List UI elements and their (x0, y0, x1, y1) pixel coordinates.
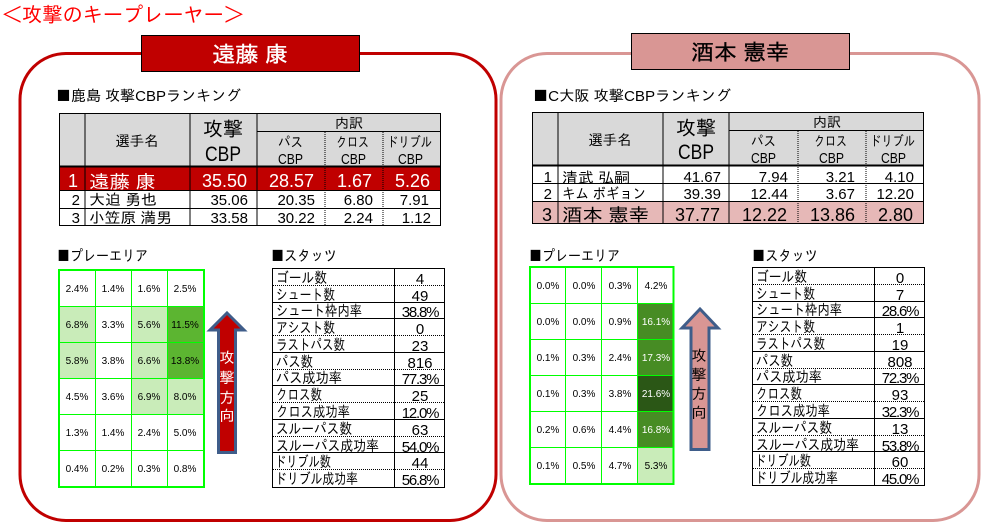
ranking table: Kashima: 大迫 勇也 (89, 192, 157, 209)
stats table: Sakamoto: シュート数 (756, 286, 815, 303)
arrow: attack direction: 攻 (220, 350, 234, 367)
stats table: Endo: パス数 (276, 354, 313, 371)
heatmap: Sakamoto play area: 0.1% (537, 353, 560, 364)
stats table: Endo: スルーパス成功率 (276, 438, 379, 455)
heading: play area: ■プレーエリア (57, 248, 148, 265)
ranking table: C Osaka: 37.77 (675, 205, 720, 225)
ranking table: Kashima: CBP (341, 151, 366, 168)
ranking table: Kashima: 内訳 (335, 115, 363, 131)
heatmap: Sakamoto play area: 0.6% (573, 425, 596, 436)
stats table: Endo: 12.0% (402, 405, 439, 422)
ranking table: Kashima: 6.80 (344, 192, 373, 209)
stats table: Endo: シュート枠内率 (276, 303, 362, 320)
arrow: attack direction: 向 (692, 405, 706, 422)
stats table: Sakamoto: クロス数 (756, 386, 802, 403)
stats table: Endo: 25 (412, 388, 428, 405)
heatmap: Sakamoto play area: 4.4% (609, 425, 632, 436)
ranking table: C Osaka: 12.44 (750, 186, 788, 203)
ranking table: Kashima: 2 (72, 192, 80, 209)
stats table: Sakamoto: 0 (896, 270, 904, 287)
heading: Kashima ranking: ■鹿島 攻撃CBPランキング (56, 88, 241, 105)
stats table: Sakamoto: スルーパス数 (756, 420, 832, 437)
stats table: Endo: ドリブル数 (275, 454, 331, 471)
ranking table: C Osaka: 3.21 (826, 169, 855, 186)
heatmap: Sakamoto play area: 3.8% (609, 389, 632, 400)
ranking table: C Osaka: 12.22 (742, 205, 787, 225)
stats table: Endo: クロス成功率 (276, 404, 350, 421)
heatmap: Sakamoto play area: 4.2% (645, 281, 668, 292)
stats table: Endo: アシスト数 (276, 320, 335, 337)
heatmap: Sakamoto play area: 0.0% (573, 317, 596, 328)
ranking table: C Osaka: 2.80 (878, 205, 913, 225)
ranking table: Kashima: 28.57 (269, 171, 314, 191)
ranking table: Kashima: 選手名 (116, 133, 158, 150)
heatmap: Sakamoto play area (530, 267, 674, 484)
player name banner: Endo (142, 36, 360, 72)
ranking table: C Osaka: クロス (814, 133, 847, 149)
arrow: attack direction (682, 309, 718, 450)
heatmap: Sakamoto play area: 0.1% (537, 389, 560, 400)
title: ＜攻撃のキープレーヤー＞ (2, 4, 244, 27)
player name banner: Sakamoto: 酒本 憲幸 (691, 40, 789, 65)
ranking table: C Osaka (532, 112, 924, 225)
heatmap: Endo play area: 1.4% (102, 284, 125, 295)
ranking table: Kashima: 30.22 (277, 210, 315, 227)
stats table: Sakamoto: 60 (892, 454, 908, 471)
ranking table: C Osaka: CBP (819, 150, 844, 167)
heatmap: Endo play area: 6.6% (138, 356, 161, 367)
stats table: Sakamoto: 32.3% (882, 404, 919, 421)
stats table: Endo: 816 (407, 355, 433, 372)
ranking table: C Osaka: 12.20 (876, 186, 914, 203)
heatmap: Endo play area: 8.0% (174, 392, 197, 403)
stats table: Endo: 49 (412, 288, 428, 305)
stats table: Sakamoto: 19 (892, 337, 908, 354)
heatmap: Sakamoto play area: 0.0% (573, 281, 596, 292)
heatmap: Sakamoto play area: 0.5% (573, 461, 596, 472)
stats table: Endo: パス成功率 (276, 370, 342, 387)
ranking table: C Osaka: 13.86 (810, 205, 855, 225)
stats table: Sakamoto: 13 (892, 421, 908, 438)
heatmap: Sakamoto play area: 0.2% (537, 425, 560, 436)
ranking table: C Osaka: 41.67 (683, 169, 721, 186)
arrow: attack direction: 撃 (692, 367, 706, 384)
ranking table: Kashima: 攻撃 (203, 119, 243, 141)
heatmap: Endo play area: 11.5% (171, 320, 199, 331)
stats table: Sakamoto: ゴール数 (756, 269, 807, 286)
stats table: Endo: 77.3% (402, 371, 439, 388)
heading: stats: ■スタッツ (271, 248, 337, 265)
stats table: Endo: ゴール数 (276, 270, 327, 287)
ranking table: C Osaka: 選手名 (588, 132, 632, 149)
ranking table: Kashima: 7.91 (400, 192, 429, 209)
player name banner: Sakamoto (632, 34, 850, 70)
ranking table: C Osaka: 3.67 (826, 186, 855, 203)
stats table: Sakamoto: 93 (892, 387, 908, 404)
arrow: attack direction: 撃 (220, 370, 234, 387)
heatmap: Endo play area: 4.5% (66, 392, 89, 403)
stats table: Sakamoto: シュート枠内率 (756, 302, 842, 319)
ranking table: Kashima: 小笠原 満男 (89, 210, 172, 227)
stats table: Endo: 4 (416, 271, 424, 288)
ranking table: Kashima: CBP (205, 143, 241, 166)
stats table: Endo: 44 (412, 455, 428, 472)
heading: stats: ■スタッツ (752, 248, 818, 265)
heatmap: Endo play area: 2.4% (138, 428, 161, 439)
ranking table: Kashima: CBP (278, 151, 303, 168)
stats table: Endo (272, 268, 444, 489)
panel: Sakamoto (501, 34, 979, 520)
heatmap: Sakamoto play area: 2.4% (609, 353, 632, 364)
heatmap: Endo play area: 1.4% (102, 428, 125, 439)
ranking table: Kashima: クロス (336, 134, 369, 150)
ranking table: C Osaka: ドリブル (870, 133, 915, 149)
player name banner: Endo: 遠藤 康 (212, 42, 288, 67)
heatmap: Endo play area: 5.0% (174, 428, 197, 439)
ranking table: C Osaka: 1 (544, 169, 552, 186)
ranking table: Kashima: 1.12 (402, 210, 431, 227)
heatmap: Sakamoto play area: 16.8% (642, 425, 670, 436)
heatmap: Endo play area: 2.4% (66, 284, 89, 295)
stats table: Sakamoto: 53.8% (882, 438, 919, 455)
stats table: Sakamoto: パス成功率 (756, 369, 822, 386)
stats table: Sakamoto: 1 (896, 320, 904, 337)
stats table: Endo: シュート数 (276, 287, 335, 304)
ranking table: C Osaka: 2 (544, 186, 552, 203)
heatmap: Endo play area: 3.6% (102, 392, 125, 403)
stats table: Sakamoto: アシスト数 (756, 319, 815, 336)
stats table: Endo: 54.0% (402, 439, 439, 456)
heatmap: Sakamoto play area: 0.9% (609, 317, 632, 328)
stats table: Sakamoto: クロス成功率 (756, 403, 830, 420)
arrow: attack direction (210, 313, 244, 452)
ranking table: Kashima: 3 (72, 210, 80, 227)
stats table: Endo: 23 (412, 338, 428, 355)
heading: play area: ■プレーエリア (529, 248, 620, 265)
stats table: Sakamoto: ラストパス数 (756, 336, 825, 353)
heatmap: Endo play area: 1.3% (66, 428, 89, 439)
heatmap: Endo play area: 13.8% (171, 356, 199, 367)
heatmap: Endo play area: 3.8% (102, 356, 125, 367)
heatmap: Sakamoto play area: 0.3% (609, 281, 632, 292)
heatmap: Endo play area: 2.5% (174, 284, 197, 295)
stats table: Sakamoto: パス数 (756, 353, 793, 370)
stats table: Endo: クロス数 (276, 387, 322, 404)
ranking table: C Osaka: 3 (542, 205, 552, 225)
heatmap: Endo play area: 0.4% (66, 464, 89, 475)
ranking table: Kashima: 1.67 (337, 171, 372, 191)
heatmap: Sakamoto play area: 0.1% (537, 461, 560, 472)
ranking table: C Osaka: キム ボギョン (562, 186, 646, 203)
ranking table: Kashima: 5.26 (395, 171, 430, 191)
stats table: Endo: 63 (412, 422, 428, 439)
ranking table: Kashima: 1 (68, 171, 78, 191)
heatmap: Sakamoto play area: 0.3% (573, 353, 596, 364)
ranking table: C Osaka: CBP (881, 150, 906, 167)
arrow: attack direction: 攻 (692, 348, 706, 365)
ranking table: C Osaka: 39.39 (683, 186, 721, 203)
ranking table: Kashima: CBP (398, 151, 423, 168)
ranking table: Kashima: 33.58 (210, 210, 248, 227)
stats table: Endo: 38.8% (402, 304, 439, 321)
heatmap: Endo play area: 0.2% (102, 464, 125, 475)
heatmap: Endo play area: 0.3% (138, 464, 161, 475)
stats table: Sakamoto: 72.3% (882, 370, 919, 387)
ranking table: C Osaka: 7.94 (759, 169, 788, 186)
stats table: Sakamoto: 28.6% (882, 303, 919, 320)
ranking table: Kashima: パス (278, 134, 303, 150)
heatmap: Sakamoto play area: 0.3% (573, 389, 596, 400)
stats table: Endo: スルーパス数 (276, 421, 352, 438)
arrow: attack direction: 方 (692, 386, 706, 403)
ranking table: Kashima: 20.35 (277, 192, 315, 209)
stats table: Sakamoto: ドリブル数 (755, 453, 811, 470)
stats table: Sakamoto: ドリブル成功率 (755, 470, 838, 487)
stats table: Endo: ドリブル成功率 (275, 471, 358, 488)
heatmap: Endo play area: 6.8% (66, 320, 89, 331)
ranking table: Kashima: ドリブル (387, 134, 432, 150)
heatmap: Endo play area: 0.8% (174, 464, 197, 475)
stats table: Sakamoto: 7 (896, 287, 904, 304)
ranking table: C Osaka: 酒本 憲幸 (562, 205, 649, 225)
ranking table: C Osaka: 内訳 (813, 114, 841, 130)
heatmap: Endo play area: 5.8% (66, 356, 89, 367)
stats table: Endo: 56.8% (402, 472, 439, 489)
ranking table: Kashima: 35.06 (210, 192, 248, 209)
heading: C Osaka ranking: ■C大阪 攻撃CBPランキング (533, 88, 731, 105)
heatmap: Sakamoto play area: 0.0% (537, 281, 560, 292)
ranking table: Kashima: 遠藤 康 (89, 172, 156, 192)
stats table: Sakamoto (752, 268, 924, 488)
heatmap: Endo play area: 5.6% (138, 320, 161, 331)
ranking table: C Osaka: 清武 弘嗣 (562, 170, 630, 187)
ranking table: C Osaka: CBP (678, 141, 714, 164)
arrow: attack direction: 方 (220, 390, 234, 407)
stats table: Endo: 0 (416, 321, 424, 338)
heatmap: Sakamoto play area: 21.6% (642, 389, 670, 400)
stats table: Endo: ラストパス数 (276, 337, 345, 354)
stats table: Sakamoto: 808 (887, 354, 913, 371)
ranking table: Kashima (60, 114, 440, 227)
ranking table: C Osaka: パス (751, 133, 776, 149)
arrow: attack direction: 向 (220, 408, 234, 425)
heatmap: Sakamoto play area: 0.0% (537, 317, 560, 328)
heatmap: Sakamoto play area: 4.7% (609, 461, 632, 472)
heatmap: Endo play area: 1.6% (138, 284, 161, 295)
heatmap: Sakamoto play area: 16.1% (642, 317, 670, 328)
heatmap: Endo play area (59, 270, 204, 487)
ranking table: C Osaka: CBP (751, 150, 776, 167)
ranking table: Kashima: 35.50 (202, 171, 247, 191)
stats table: Sakamoto: スルーパス成功率 (756, 437, 859, 454)
heatmap: Sakamoto play area: 5.3% (645, 461, 668, 472)
panel: Endo (20, 36, 496, 520)
ranking table: Kashima: 2.24 (344, 210, 373, 227)
heatmap: Sakamoto play area: 17.3% (642, 353, 670, 364)
heatmap: Endo play area: 3.3% (102, 320, 125, 331)
heatmap: Endo play area: 6.9% (138, 392, 161, 403)
ranking table: C Osaka: 4.10 (885, 169, 914, 186)
stats table: Sakamoto: 45.0% (882, 471, 919, 488)
ranking table: C Osaka: 攻撃 (676, 118, 716, 140)
